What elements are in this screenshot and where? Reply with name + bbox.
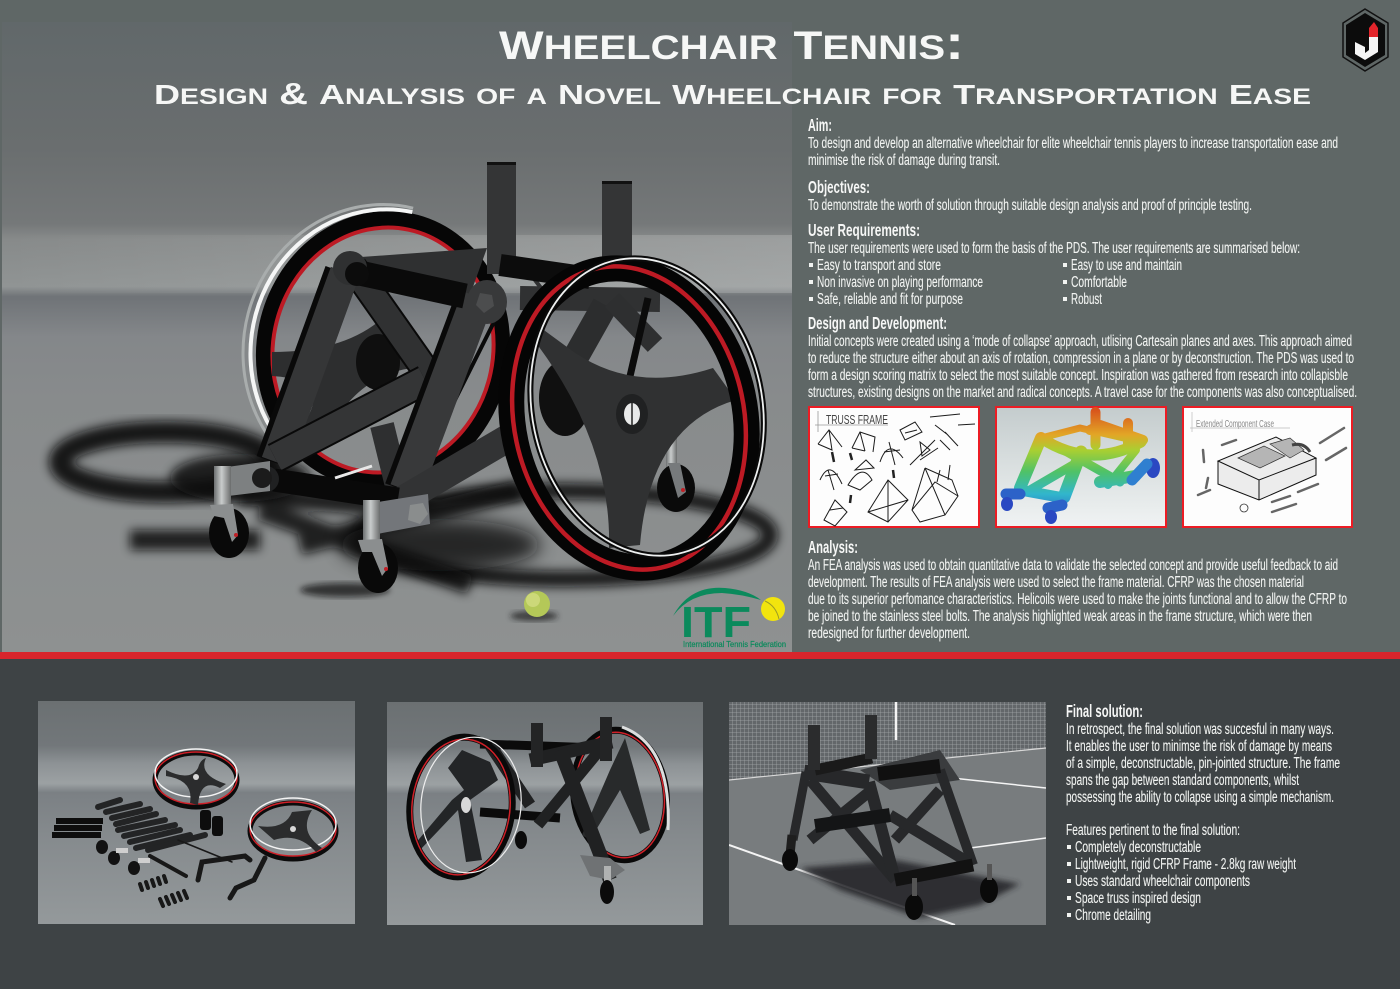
title	[154, 17, 1311, 111]
text: user requirements: Non invasive on playing performance	[817, 274, 983, 291]
text: analysis: Analysis:	[808, 537, 858, 557]
text: final solution: Space truss inspired design	[1075, 890, 1201, 907]
text: final solution: Uses standard wheelchair components	[1075, 873, 1250, 890]
upper panel background	[0, 0, 1400, 652]
seat posts	[487, 162, 632, 274]
text: objectives	[808, 177, 1252, 214]
text: analysis: redesigned for further development.	[808, 625, 970, 642]
exploded wheels	[155, 749, 336, 859]
truss frame	[253, 248, 660, 502]
subtitle: Design & Analysis of a Novel Wheelchair for Transportation Ease	[154, 76, 1311, 111]
text: final solution: Completely deconstructable	[1075, 839, 1201, 856]
text: aim: Aim:	[808, 115, 832, 135]
ITF logo: International Tennis Federation	[683, 639, 786, 649]
front casters and arms	[209, 461, 430, 593]
exploded frame links	[98, 800, 205, 850]
text: final solution: Features pertinent to the final solution:	[1066, 822, 1240, 839]
text: user requirements: Easy to transport and store	[817, 257, 941, 274]
text: final solution	[1066, 701, 1340, 924]
text: aim	[808, 115, 1338, 169]
exploded view render	[38, 701, 355, 924]
front wheel	[483, 236, 793, 592]
title: Wheelchair Tennis:	[499, 17, 964, 70]
folded wheelchair render	[387, 702, 703, 925]
rear wheel spokes	[272, 322, 412, 446]
sketch: truss frame: TRUSS FRAME	[826, 412, 888, 427]
ITF logo	[673, 588, 786, 649]
wheelchair illustration	[209, 162, 793, 593]
red divider band	[0, 652, 1400, 659]
text: user requirements	[808, 220, 1300, 308]
court shadow	[800, 860, 1020, 918]
text: user requirements: User Requirements:	[808, 220, 920, 240]
text: final solution: Chrome detailing	[1075, 907, 1151, 924]
sketch: travel case: Extended Component Case	[1196, 419, 1274, 430]
ground shadows	[60, 432, 770, 621]
sketch: truss frame	[809, 407, 979, 527]
text: analysis	[808, 537, 1347, 642]
text: objectives: Objectives:	[808, 177, 870, 197]
tennis ball	[524, 591, 550, 617]
rear caster	[657, 425, 695, 512]
truss on court	[790, 750, 973, 880]
FEA analysis image	[996, 407, 1166, 527]
text: design and development: Design and Development:	[808, 313, 947, 333]
text: user requirements: Comfortable	[1071, 274, 1127, 291]
brand logo	[1343, 9, 1388, 71]
text: user requirements: Easy to use and maintain	[1071, 257, 1182, 274]
rear struts seen through front wheel	[520, 298, 660, 300]
ITF logo: ITF	[681, 598, 751, 647]
text: user requirements: Robust	[1071, 291, 1102, 308]
lower panel background	[0, 659, 1400, 989]
rear wheel	[219, 179, 529, 503]
tennis court render	[729, 702, 1046, 925]
text: user requirements: Safe, reliable and fit for purpose	[817, 291, 963, 308]
text: design and development	[808, 313, 1357, 401]
hero render panel	[2, 22, 792, 652]
text: final solution: Final solution:	[1066, 701, 1143, 721]
text: aim: minimise the risk of damage during transit.	[808, 152, 1000, 169]
sketch: travel case	[1183, 407, 1352, 527]
